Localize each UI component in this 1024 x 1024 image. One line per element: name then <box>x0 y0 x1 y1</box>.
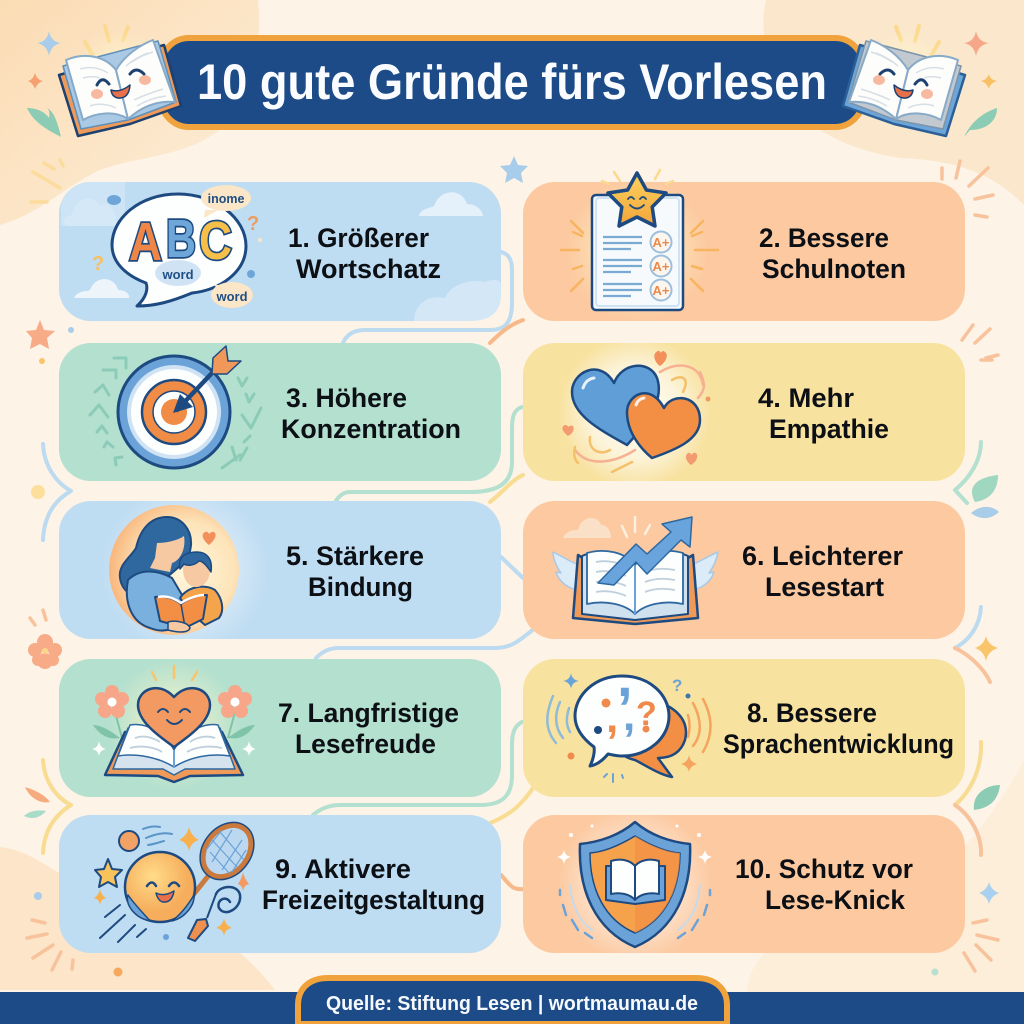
icon: ABC speech bubble: B <box>166 209 196 269</box>
label: Empathie <box>769 414 889 444</box>
panel: 3 Höhere Konzentration <box>59 343 501 481</box>
label <box>281 383 461 444</box>
icon: ABC speech bubble: word <box>215 289 248 304</box>
icon: smiling book left <box>59 26 181 136</box>
label: 6. Leichterer <box>742 541 903 571</box>
icon: happy ball with racket <box>94 812 265 942</box>
icon: ABC speech bubble: ? <box>247 213 259 235</box>
side bracket ornaments <box>43 442 990 855</box>
icon: speech bubbles with punctuation: , <box>617 645 633 708</box>
panel: 6 Leichterer Lesestart <box>523 501 965 639</box>
icon: winged book with rising arrow <box>553 517 718 624</box>
panel: 10 Schutz vor Lese-Knick <box>523 807 965 963</box>
panel: 4 Mehr Empathie <box>523 336 965 488</box>
icon: speech bubbles with punctuation: , <box>606 693 618 742</box>
label: Lesefreude <box>295 729 436 759</box>
label: Freizeitgestaltung <box>262 885 485 915</box>
icon: ABC speech bubble: ? <box>92 253 104 275</box>
panel: 1 Größerer Wortschatz <box>59 182 501 321</box>
label <box>735 854 913 915</box>
icon: ABC speech bubble: A <box>129 212 162 272</box>
label: 7. Langfristige <box>278 698 459 728</box>
label: 8. Bessere <box>747 698 877 728</box>
icon: speech bubbles with punctuation: ? <box>672 676 682 695</box>
icon: speech bubbles with punctuation: , <box>623 691 635 740</box>
label <box>758 383 889 444</box>
label: 1. Größerer <box>288 223 429 253</box>
label: 4. Mehr <box>758 383 854 413</box>
icon: report card with star <box>561 170 718 322</box>
panel: 7 Langfristige Lesefreude <box>59 659 501 797</box>
icon: open book with smiling heart <box>92 659 256 791</box>
label <box>286 541 424 602</box>
icon: speech bubbles with punctuation <box>547 645 710 782</box>
label: Lese-Knick <box>765 885 906 915</box>
icon: report card with star: A+ <box>653 283 670 298</box>
icon: target with arrow <box>90 346 261 468</box>
panel: 5 Stärkere Bindung <box>59 485 501 655</box>
label: 2. Bessere <box>759 223 889 253</box>
label: 9. Aktivere <box>275 854 411 884</box>
icon: ABC speech bubble: inome <box>208 192 244 206</box>
icon: smiling book right <box>843 26 965 136</box>
label: Sprachentwicklung <box>723 729 954 759</box>
label <box>288 223 441 284</box>
panel: 8 Bessere Sprachentwicklung <box>523 645 965 797</box>
label <box>278 698 459 759</box>
footer bar <box>0 978 1024 1024</box>
icon: ABC speech bubble: C <box>199 211 232 271</box>
panel: 2 Bessere Schulnoten <box>523 170 965 322</box>
label <box>742 541 903 602</box>
icon: two hearts <box>559 336 711 488</box>
label: 3. Höhere <box>286 383 407 413</box>
icon: shield with book <box>557 807 713 963</box>
label <box>723 698 954 759</box>
icon: parent reading with child <box>100 485 270 655</box>
icon: speech bubbles with punctuation: ? <box>636 695 657 733</box>
label: Wortschatz <box>296 254 441 284</box>
icon: report card with star: A+ <box>653 259 670 274</box>
panel: 9 Aktivere Freizeitgestaltung <box>59 812 501 953</box>
title text: 10 gute Gründe fürs Vorlesen <box>197 54 827 110</box>
label: Lesestart <box>765 572 884 602</box>
source text: Quelle: Stiftung Lesen | wortmaumau.de <box>326 993 698 1015</box>
icon: report card with star: A+ <box>653 235 670 250</box>
label <box>759 223 906 284</box>
icon: ABC speech bubble: word <box>161 267 194 282</box>
connector lines between cards <box>313 252 535 889</box>
icon: ABC speech bubble <box>92 185 262 308</box>
label: Bindung <box>308 572 413 602</box>
label: 10. Schutz vor <box>735 854 913 884</box>
title banner <box>161 38 863 127</box>
label: Konzentration <box>281 414 461 444</box>
label: 5. Stärkere <box>286 541 424 571</box>
label <box>262 854 485 915</box>
label: Schulnoten <box>762 254 906 284</box>
